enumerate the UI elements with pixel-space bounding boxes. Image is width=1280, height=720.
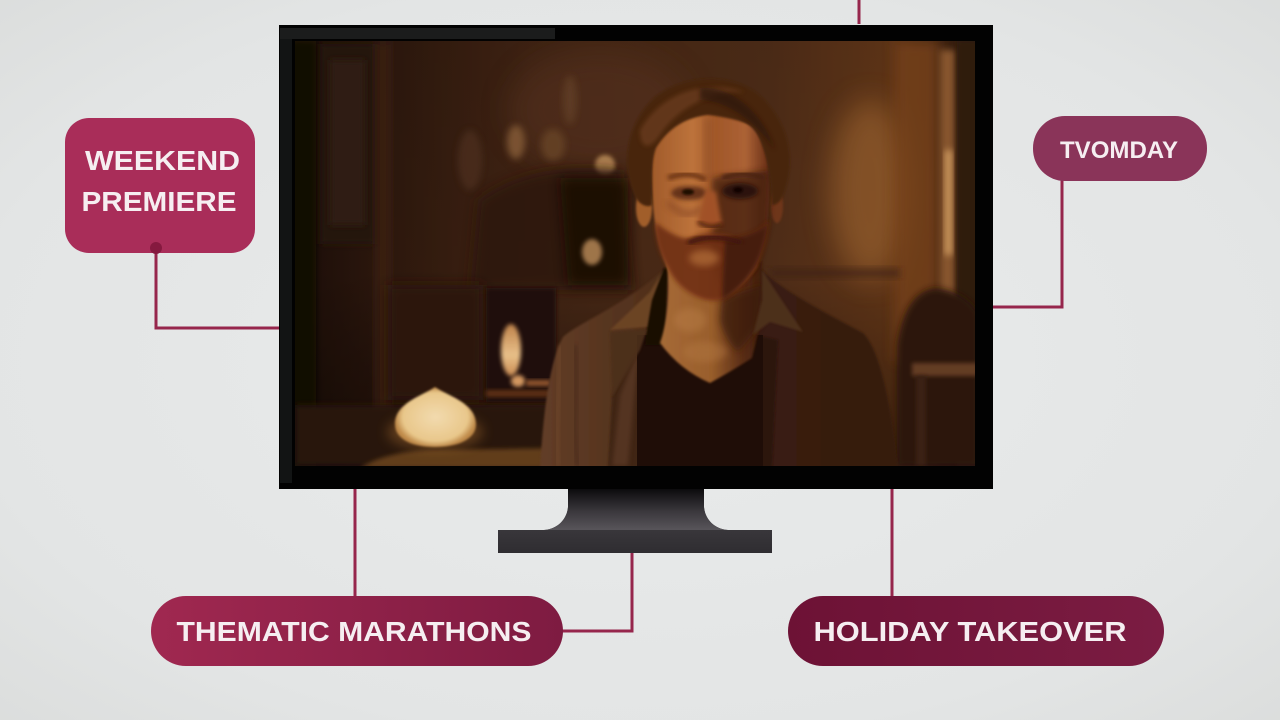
- left dark panel: [295, 42, 318, 402]
- monitor stand: [498, 488, 772, 553]
- blurred wall spots: [507, 125, 525, 159]
- shirt collar shadow: [645, 268, 668, 345]
- lamp: [387, 414, 483, 450]
- label: tvomday: [1033, 116, 1207, 181]
- lower lip and chin highlight: [689, 250, 719, 266]
- ears: [636, 189, 652, 227]
- jacket folds: [557, 345, 560, 466]
- head: [652, 112, 769, 300]
- placket right: [763, 336, 778, 466]
- fireplace: [486, 288, 556, 402]
- label: thematic marathons: [151, 596, 563, 666]
- label: holiday takeover: [788, 596, 1164, 666]
- collar right: [754, 272, 802, 334]
- forehead shadow centre: [704, 119, 711, 176]
- wall glows: [515, 60, 662, 160]
- nose: [698, 190, 722, 228]
- neck: [660, 262, 762, 383]
- beard: [655, 220, 769, 301]
- hair: [627, 79, 790, 206]
- label: weekend premiere: [65, 118, 255, 254]
- label: weekend premiere: WEEKEND: [85, 145, 240, 176]
- jacket: [540, 268, 898, 468]
- under eye: [668, 202, 702, 214]
- lower wall: [388, 285, 483, 400]
- monitor frame: [279, 25, 993, 489]
- mantel band: [770, 268, 900, 278]
- right face shadow: [712, 170, 770, 296]
- label: weekend premiere: PREMIERE: [82, 186, 236, 217]
- mouth: [688, 238, 742, 243]
- eye sockets: [671, 186, 707, 200]
- floor / table: [295, 403, 412, 466]
- brow: [668, 174, 706, 180]
- t-shirt: [637, 335, 763, 468]
- label: holiday takeover: HOLIDAY TAKEOVER: [814, 616, 1126, 647]
- label: tvomday: TVOMDAY: [1060, 137, 1178, 164]
- movie scene: [290, 41, 979, 468]
- man: [540, 79, 898, 468]
- collar left: [610, 270, 663, 330]
- hair highlights: [640, 87, 745, 146]
- right furniture: [897, 288, 978, 466]
- placket left: [608, 356, 637, 466]
- connector lines: [156, 0, 1062, 631]
- label: thematic marathons: THEMATIC MARATHONS: [176, 616, 532, 647]
- dark silhouette: [470, 168, 632, 290]
